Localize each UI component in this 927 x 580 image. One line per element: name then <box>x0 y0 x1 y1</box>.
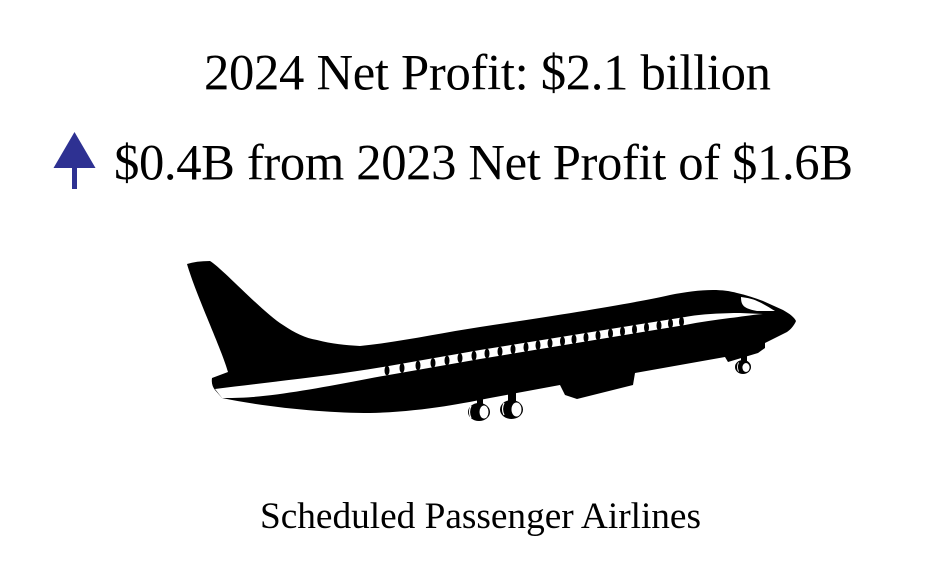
airplane windows <box>384 317 684 376</box>
airplane windshield <box>741 297 775 311</box>
airplane body <box>187 261 796 413</box>
icon: up arrow <box>54 132 96 189</box>
caption: scheduled passenger airlines: Scheduled Passenger Airlines <box>260 496 701 537</box>
title: 2024 net profit: 2024 Net Profit: $2.1 billion <box>204 44 771 100</box>
airplane nose landing gear <box>735 355 751 374</box>
airplane rear landing gear <box>468 390 523 421</box>
airplane cheat line <box>215 313 763 398</box>
text: change from 2023 net profit: $0.4B from 2023 Net Profit of $1.6B <box>114 134 853 190</box>
icon: airplane silhouette <box>187 261 796 421</box>
